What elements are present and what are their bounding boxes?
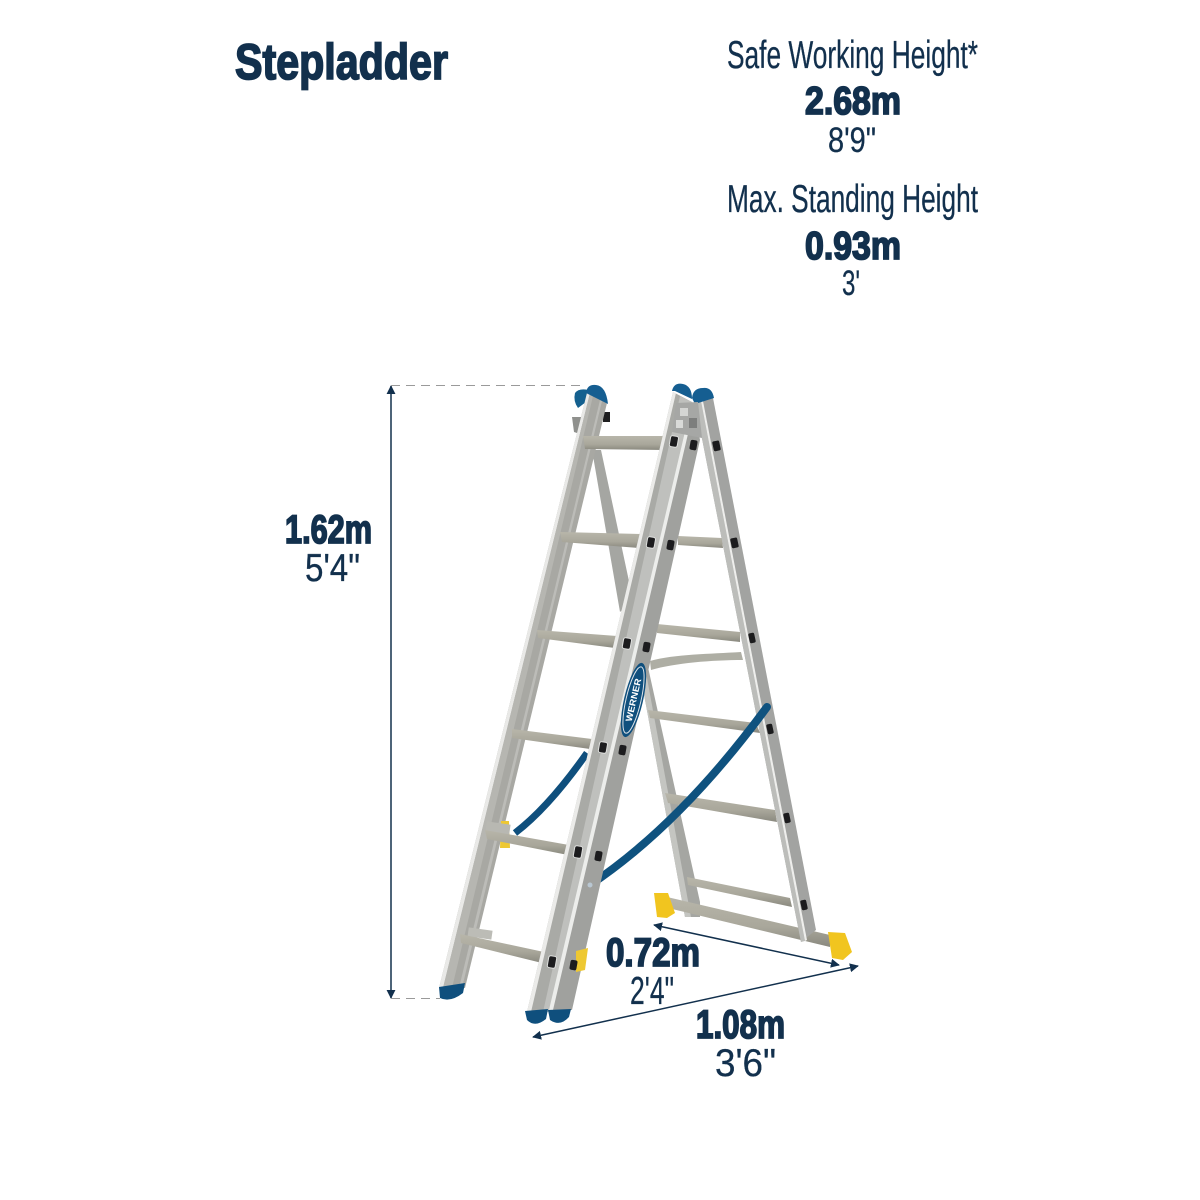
outer width label xyxy=(696,1003,785,1085)
title: Stepladder xyxy=(235,34,448,90)
inner width label xyxy=(606,931,700,1013)
safe working height spec: 8'9" xyxy=(828,121,876,160)
outer width label: 3'6" xyxy=(715,1042,776,1085)
left front stile xyxy=(439,385,610,1000)
safe working height spec xyxy=(727,34,978,160)
inner width label: 2'4" xyxy=(630,970,674,1013)
max standing height spec: Max. Standing Height xyxy=(727,178,978,221)
right rear section xyxy=(634,388,852,960)
height dimension line xyxy=(391,386,585,998)
max standing height spec: 3' xyxy=(842,264,860,303)
height label xyxy=(285,508,372,590)
rung holes on front ladder xyxy=(547,435,698,971)
left section rungs xyxy=(460,436,664,963)
safe working height spec: Safe Working Height* xyxy=(727,34,978,77)
safe working height spec: 2.68m xyxy=(805,80,901,123)
Werner logo xyxy=(616,661,651,739)
inner width label: 0.72m xyxy=(606,931,700,975)
height label: 1.62m xyxy=(285,508,372,552)
blue brace: right xyxy=(590,707,767,885)
brace bolt xyxy=(588,882,592,888)
max standing height spec xyxy=(727,178,978,303)
inner width arrow xyxy=(654,925,839,965)
outer width label: 1.08m xyxy=(696,1003,785,1047)
Werner logo: WERNER xyxy=(624,677,643,723)
max standing height spec: 0.93m xyxy=(805,225,901,268)
ladder illustration xyxy=(439,384,852,1024)
front ladder stiles xyxy=(525,384,702,1024)
outer width arrow xyxy=(533,966,858,1037)
blue brace: left xyxy=(515,753,587,833)
height label: 5'4" xyxy=(305,547,360,590)
back diagonal strut xyxy=(592,450,633,612)
